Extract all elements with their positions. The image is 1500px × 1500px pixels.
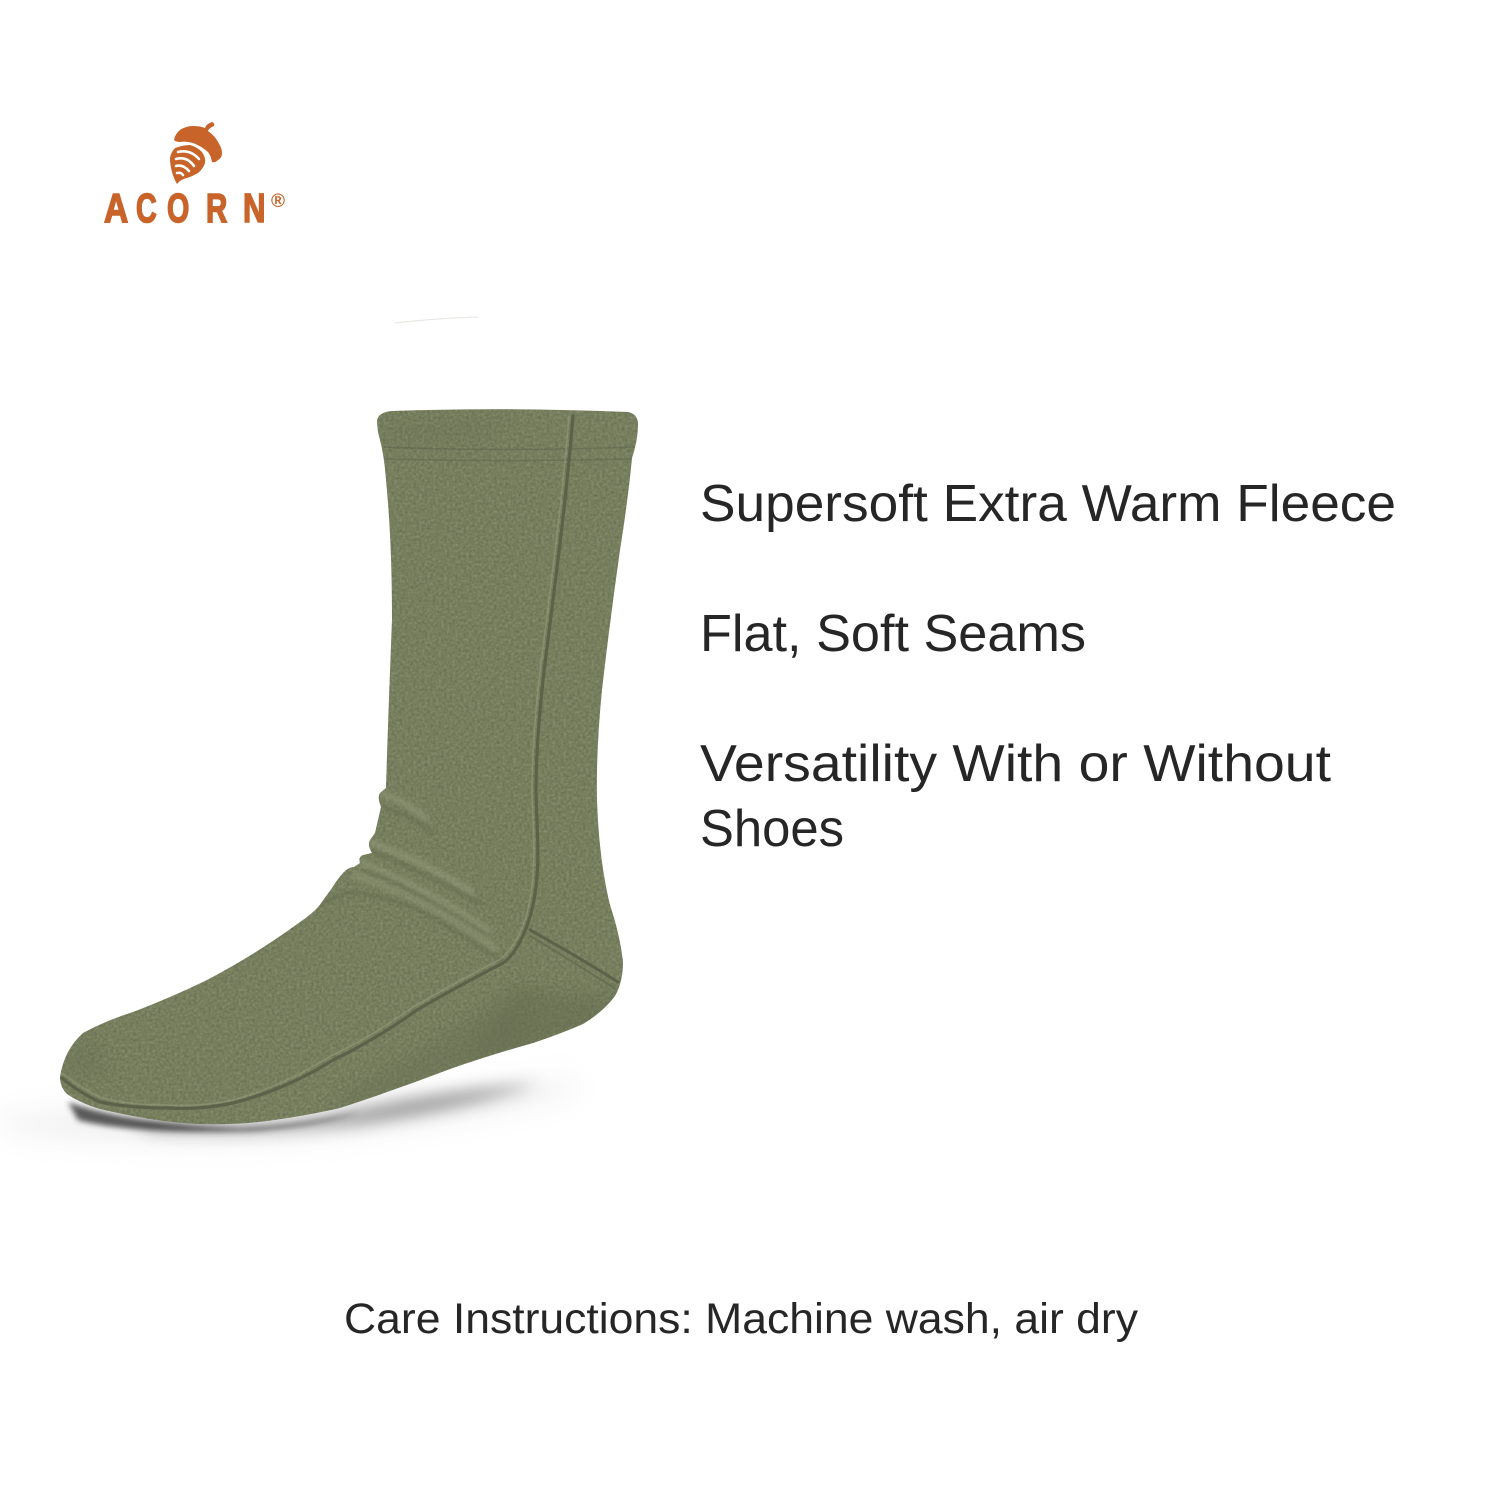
logo: Acorn [104, 122, 285, 231]
feature: versatility, second line: Shoes [700, 800, 844, 858]
wordmark: O [167, 186, 189, 231]
sock shading and folds [78, 500, 613, 1107]
wordmark: C [136, 186, 157, 231]
wordmark: A [104, 185, 128, 231]
wordmark: R [206, 185, 227, 231]
registered mark: ® [271, 191, 285, 212]
feature list [700, 475, 1396, 858]
wordmark: N [243, 185, 266, 231]
wordmark [104, 185, 266, 231]
sock body [60, 409, 638, 1124]
shadow [0, 1080, 575, 1140]
seams [62, 416, 634, 1108]
feature: seams: Flat, Soft Seams [700, 605, 1086, 663]
feature: fleece: Supersoft Extra Warm Fleece [700, 475, 1396, 533]
care instructions: Care Instructions: Machine wash, air dry [344, 1295, 1139, 1343]
icon: acorn [170, 122, 222, 184]
product image: fleece sock [0, 409, 638, 1140]
feature: versatility: Versatility With or Without [700, 735, 1332, 793]
decorative faint mark [395, 317, 478, 323]
